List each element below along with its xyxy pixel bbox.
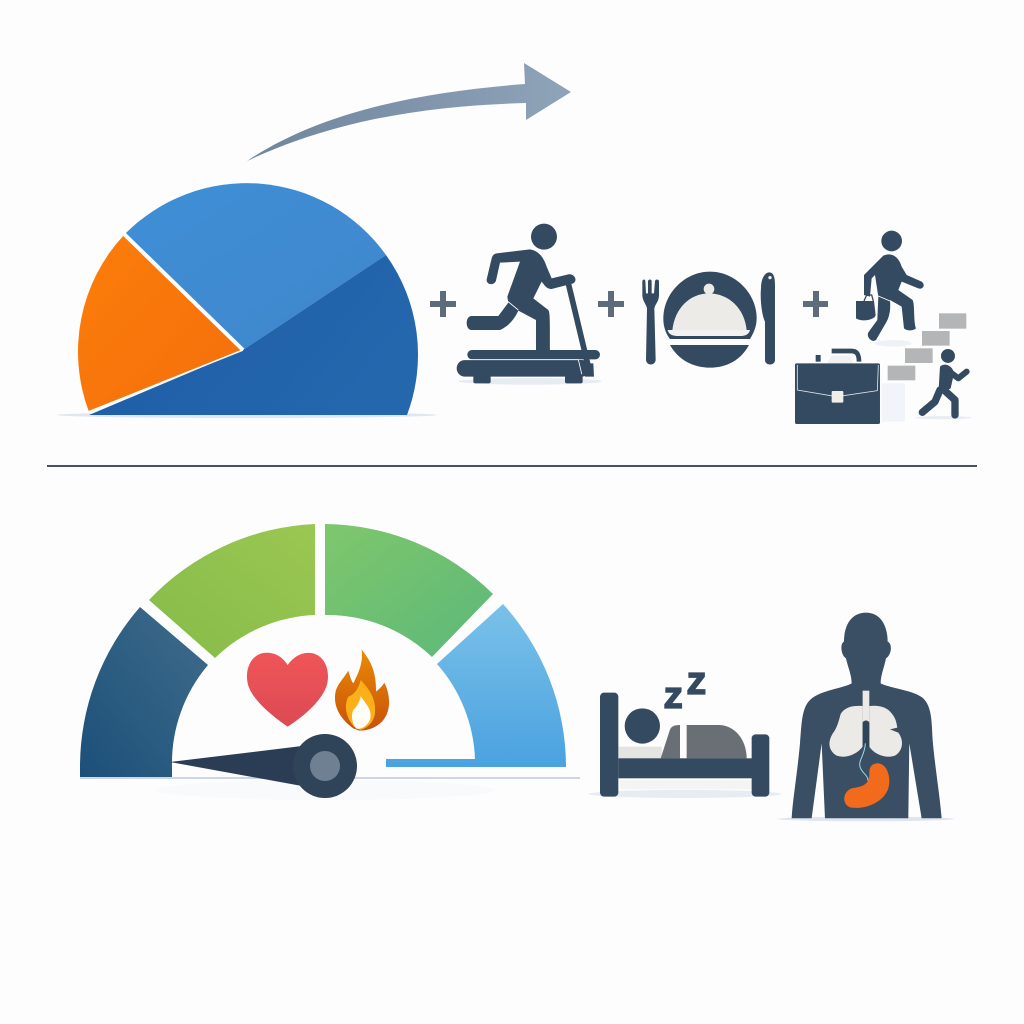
lungs xyxy=(829,691,902,757)
sleep letters zz xyxy=(665,669,705,713)
icon: briefcase xyxy=(795,351,905,424)
divider line xyxy=(47,465,977,467)
icon: human torso with organs xyxy=(778,613,954,821)
icon: covered dish with fork and knife xyxy=(642,272,775,368)
panel: bottom section xyxy=(80,524,954,821)
panel: top section xyxy=(57,63,972,424)
icon: small running person xyxy=(915,349,972,419)
icon: sleeping person in bed xyxy=(588,669,782,798)
icon: staircase of grey bricks xyxy=(888,313,966,380)
stomach xyxy=(844,763,889,808)
gauge xyxy=(80,524,580,800)
pie chart dome xyxy=(57,183,437,418)
sleep letters zz: Z xyxy=(688,669,705,701)
icon: heart xyxy=(247,653,328,727)
plus sign 3 xyxy=(803,291,828,317)
sleep letters zz: Z xyxy=(665,682,682,713)
icon: flame xyxy=(335,649,389,731)
icon: walking person with bag xyxy=(856,231,924,347)
plus sign 1 xyxy=(430,291,456,317)
icon: person on treadmill xyxy=(457,224,602,385)
plus sign 2 xyxy=(598,291,624,317)
gauge needle xyxy=(170,734,357,798)
airway line xyxy=(860,743,868,781)
curved growth arrow xyxy=(247,63,571,161)
